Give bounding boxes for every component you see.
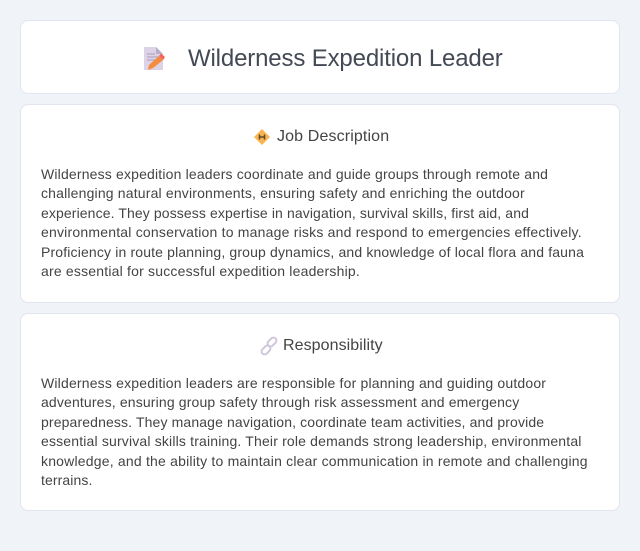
text block: responsibility: Wilderness expedition leaders are responsible for planning and guiding outdoor [41,375,546,391]
heading: job description: Job Description [277,128,389,145]
text block: responsibility: knowledge, and the ability to maintain clear communication in remote and challenging [41,453,588,469]
text block: job description: Proficiency in route planning, group dynamics, and knowledge of local flora and fauna [41,244,584,260]
text block: job description: experience. They possess expertise in navigation, survival skills, first aid, and [41,205,529,221]
panel: job description [20,104,620,303]
icon: orange diamond sign [254,129,270,145]
panel: title card [20,20,620,94]
icon: chain link [260,336,278,356]
text block: responsibility: preparedness. They manage navigation, coordinate team activities, and provide [41,414,544,430]
heading: responsibility: Responsibility [283,337,383,354]
icon: document with pencil [144,47,165,70]
panel: responsibility [20,313,620,511]
text block: responsibility [41,375,588,488]
text block: responsibility: terrains. [41,472,92,488]
title: Wilderness Expedition Leader [188,45,503,72]
text block: responsibility: adventures, ensuring group safety through risk assessment and emergency [41,394,519,410]
text block: job description: Wilderness expedition leaders coordinate and guide groups through remote and [41,166,548,182]
text block: job description: challenging natural environments, ensuring safety and enriching the outdoor [41,185,525,201]
text block: job description: are essential for successful expedition leadership. [41,263,360,279]
text block: job description [41,166,584,279]
text block: job description: environmental conservation to manage risks and respond to emergencies effectively. [41,224,582,240]
text block: responsibility: essential survival skills training. Their role demands strong leadership, environmental [41,433,582,449]
